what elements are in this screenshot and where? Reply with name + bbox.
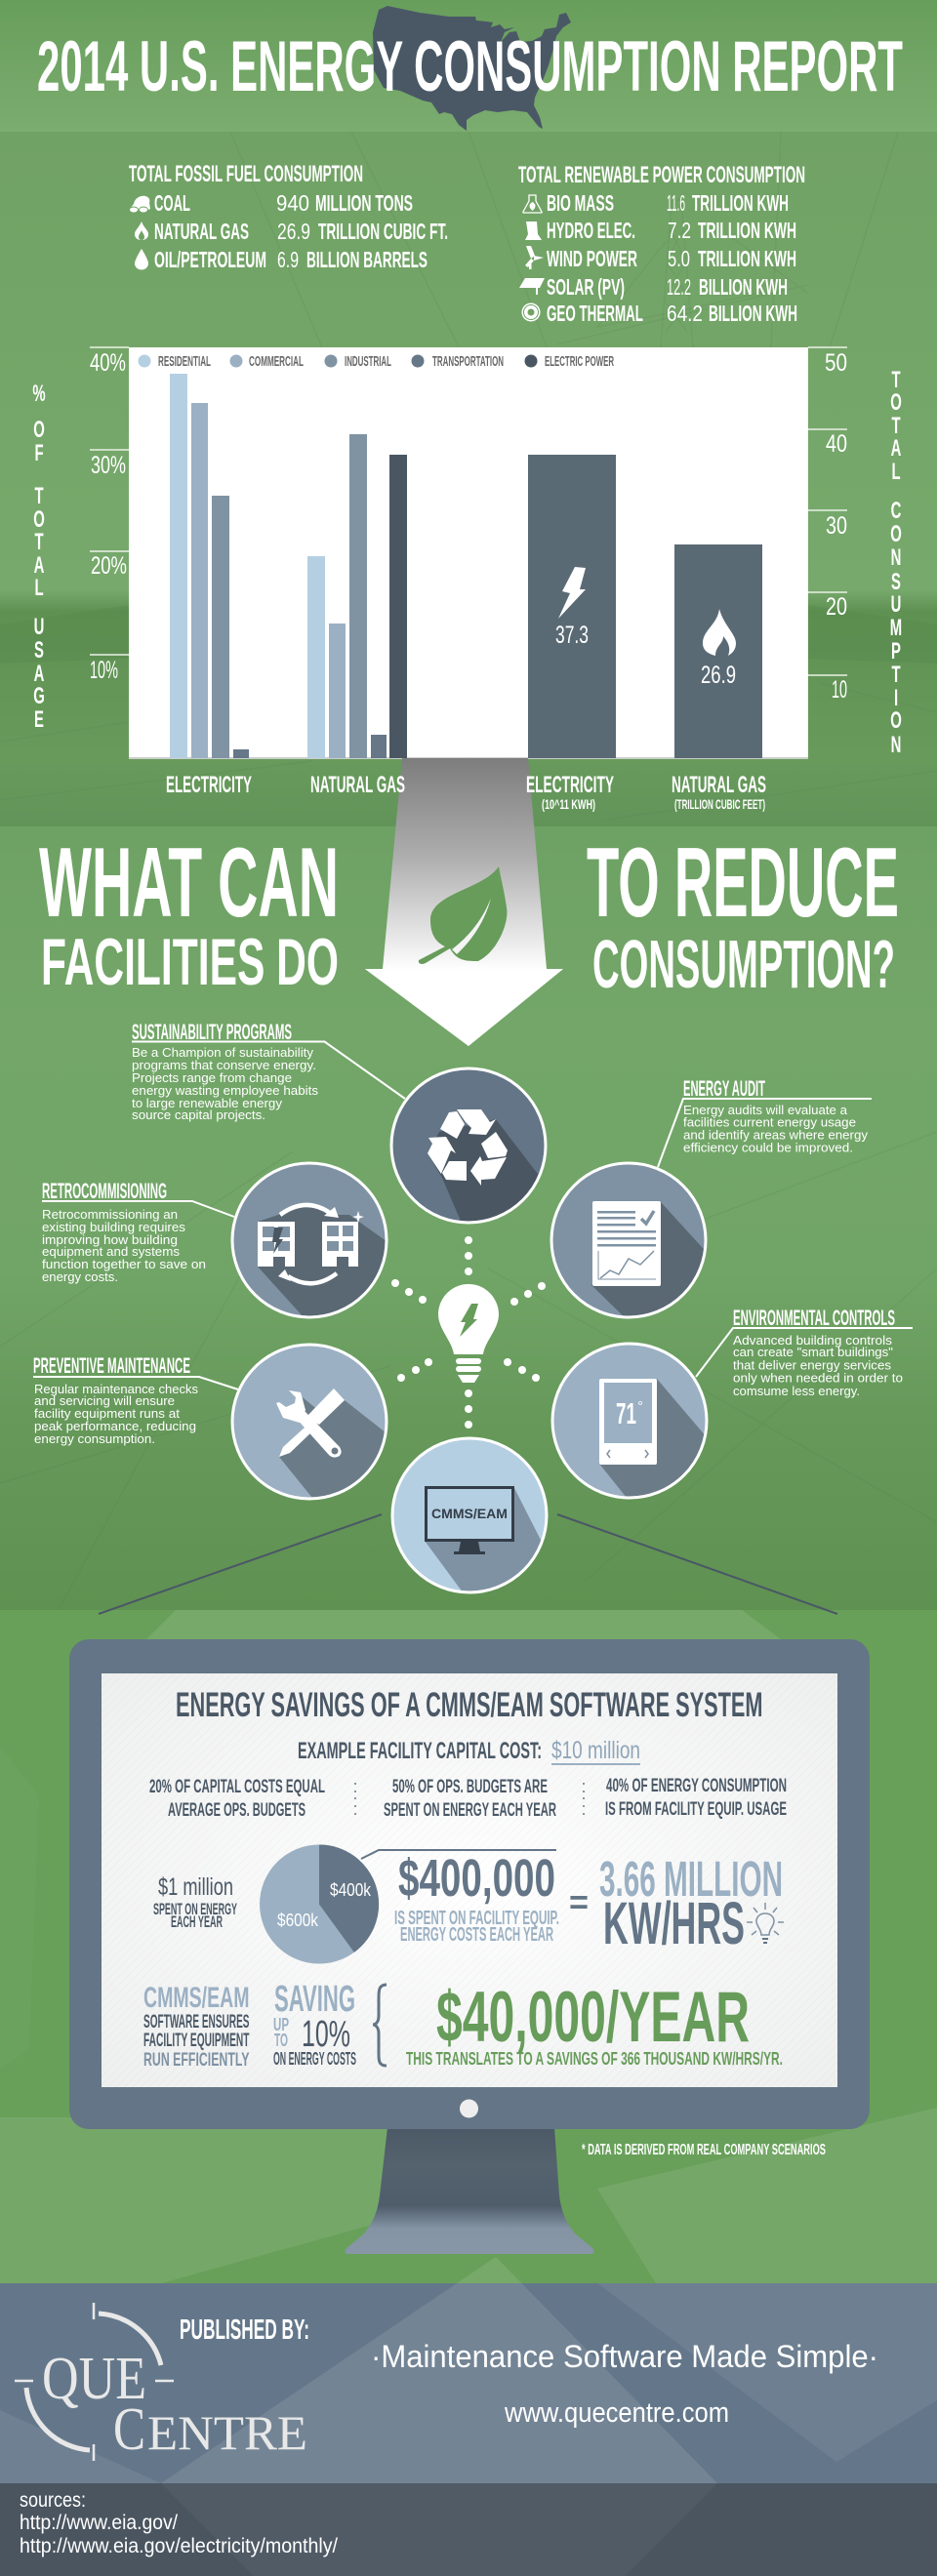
row: solar: 12.2 — [667, 274, 691, 300]
left axis labels: 40% — [90, 349, 126, 377]
row: hydro — [547, 218, 796, 243]
row: oil: BILLION BARRELS — [306, 247, 428, 272]
tagline: ·Maintenance Software Made Simple· — [371, 2339, 878, 2374]
x axis labels: ELECTRICITY — [166, 772, 252, 798]
software note — [143, 1982, 250, 2071]
y axis label: percent of total usage: U — [34, 615, 44, 640]
monitor stand — [346, 2127, 593, 2254]
y axis label: total consumption: N — [891, 733, 901, 758]
row: coal — [154, 190, 413, 216]
sources: http://www.eia.gov/ — [20, 2512, 178, 2534]
x axis labels: (10^11 KWH) — [542, 796, 595, 812]
row: hydro: 7.2 — [668, 218, 691, 243]
connecting dots — [391, 1236, 546, 1429]
right axis labels: 50 — [825, 349, 847, 377]
callout: preventive maintenance: and servicing will ensure — [34, 1394, 175, 1408]
one million label: $1 million — [158, 1873, 233, 1901]
callout: energy audit: ENERGY AUDIT — [683, 1076, 765, 1101]
row: wind — [547, 246, 796, 271]
y axis label: total consumption: N — [891, 545, 901, 571]
capital cost line: EXAMPLE FACILITY CAPITAL COST: — [298, 1738, 542, 1764]
logo: Que Centre — [15, 2303, 307, 2463]
callout: retrocommisioning: improving how building — [42, 1233, 178, 1247]
y axis label: percent of total usage: E — [34, 707, 44, 733]
callout: sustainability programs: Projects range from change — [132, 1071, 292, 1085]
row: wind: TRILLION KWH — [698, 246, 796, 271]
legend: INDUSTRIAL — [345, 354, 391, 370]
icon: oil drop — [135, 249, 148, 269]
savings result — [406, 1978, 783, 2069]
callout: sustainability programs: Be a Champion of sustainability — [132, 1046, 314, 1060]
y axis label: total consumption: I — [894, 686, 898, 711]
y axis label: total consumption — [890, 368, 902, 758]
bar: total electricity: 37.3 — [555, 622, 589, 649]
saving note: SAVING — [274, 1979, 355, 2020]
y axis label: total consumption: T — [891, 414, 901, 439]
right axis labels — [825, 349, 847, 704]
callout: retrocommisioning: equipment and systems — [42, 1245, 180, 1259]
icon: coal — [129, 196, 150, 213]
y axis label: percent of total usage — [32, 382, 46, 733]
equals sign: = — [569, 1884, 589, 1921]
row: geo thermal: GEO THERMAL — [547, 301, 643, 326]
logo: Que Centre: ENTRE — [147, 2405, 307, 2460]
row: wind: WIND POWER — [547, 246, 637, 271]
y axis label: total consumption: O — [890, 522, 902, 547]
four hundred thousand callout — [394, 1849, 559, 1946]
one million label: EACH YEAR — [171, 1912, 223, 1931]
software note: RUN EFFICIENTLY — [143, 2050, 250, 2071]
icon: flame — [135, 221, 148, 240]
saving note: TO — [274, 2031, 288, 2050]
icon: lightning bolt — [558, 567, 586, 619]
y axis label: percent of total usage: S — [34, 638, 44, 664]
row: natural gas — [154, 219, 448, 244]
arrow with leaf — [365, 758, 563, 1046]
heading: what can facilities do: WHAT CAN — [39, 828, 339, 938]
statistic columns: SPENT ON ENERGY EACH YEAR — [384, 1800, 556, 1821]
y axis label: total consumption: M — [890, 616, 902, 641]
bars: natural gas by sector — [307, 434, 407, 758]
callout: preventive maintenance — [33, 1353, 238, 1446]
row: coal: 940 — [276, 190, 309, 216]
legend: ELECTRIC POWER — [545, 354, 614, 370]
left axis labels: 30% — [91, 452, 126, 479]
four hundred thousand callout: IS SPENT ON FACILITY EQUIP. — [394, 1908, 559, 1929]
y axis label: percent of total usage: T — [34, 484, 44, 509]
kilowatt hours: KW/HRS — [603, 1890, 745, 1956]
y axis label: total consumption: C — [891, 499, 901, 524]
icon: report document — [592, 1201, 661, 1286]
callout: preventive maintenance: Regular maintenance checks — [34, 1383, 198, 1396]
row: bio mass — [547, 190, 789, 216]
panel: fossil fuel consumption: TOTAL FOSSIL FUEL CONSUMPTION — [129, 161, 363, 187]
callout: environmental controls: comsume less energy. — [733, 1385, 860, 1398]
callout: preventive maintenance: facility equipment runs at — [34, 1407, 181, 1421]
connector lines to monitor — [99, 1514, 837, 1614]
icon: thermostat: 71 — [616, 1396, 636, 1430]
icon: thermostat — [599, 1379, 657, 1465]
callout: energy audit: facilities current energy usage — [683, 1116, 856, 1130]
one million label — [153, 1873, 237, 1931]
legend: RESIDENTIAL — [158, 354, 211, 370]
x axis labels: NATURAL GAS — [672, 772, 766, 798]
x axis labels: ELECTRICITY — [526, 772, 614, 798]
y axis label: percent of total usage: L — [34, 576, 44, 601]
callout: retrocommisioning: RETROCOMMISIONING — [42, 1179, 167, 1203]
legend: COMMERCIAL — [249, 354, 304, 370]
icon: solar panel — [519, 278, 545, 295]
y axis label: percent of total usage: % — [32, 382, 46, 407]
y axis label: total consumption: S — [891, 570, 901, 595]
kilowatt hours — [599, 1851, 784, 1956]
legend — [139, 354, 614, 370]
circle: recycle — [391, 1068, 547, 1239]
row: solar — [547, 274, 788, 300]
row: natural gas: NATURAL GAS — [154, 219, 249, 244]
callout: sustainability programs: SUSTAINABILITY PROGRAMS — [132, 1020, 292, 1044]
callout: retrocommisioning — [42, 1179, 234, 1284]
row: solar: SOLAR (PV) — [547, 274, 625, 300]
bar: total natural gas — [674, 544, 762, 758]
y axis label: percent of total usage: A — [34, 553, 44, 579]
row: natural gas: 26.9 — [277, 219, 310, 244]
callout: preventive maintenance: peak performance, reducing — [34, 1420, 196, 1433]
saving note: 10% — [302, 2014, 350, 2055]
callout: preventive maintenance: energy consumption. — [34, 1432, 155, 1446]
sources: http://www.eia.gov/electricity/monthly/ — [20, 2535, 338, 2557]
callout: retrocommisioning: Retrocommissioning an — [42, 1208, 178, 1222]
icon: geothermal globe — [521, 302, 541, 322]
icon: home button — [460, 2100, 478, 2117]
icon: buildings with arrows — [258, 1205, 364, 1283]
row: geo thermal — [547, 301, 797, 326]
row: coal: COAL — [154, 190, 190, 216]
monitor — [69, 1639, 870, 2129]
y axis label: total consumption: L — [891, 460, 901, 485]
bar: total electricity — [528, 455, 616, 758]
pie chart: $600k — [277, 1911, 319, 1930]
callout: energy audit: efficiency could be improved. — [683, 1142, 853, 1155]
y axis label: total consumption: O — [890, 390, 902, 416]
callout: retrocommisioning: energy costs. — [42, 1270, 118, 1284]
row: coal: MILLION TONS — [315, 190, 413, 216]
circle: environmental controls — [552, 1344, 713, 1508]
heading: what can facilities do: FACILITIES DO — [41, 925, 339, 999]
y axis label: total consumption: U — [891, 592, 901, 618]
right axis labels: 10 — [832, 676, 847, 704]
monitor: ON ENERGY COSTS — [273, 2049, 356, 2069]
row: hydro: HYDRO ELEC. — [547, 218, 635, 243]
software note: SOFTWARE ENSURES — [143, 2012, 250, 2033]
y axis label: percent of total usage: F — [34, 441, 44, 466]
right axis labels: 30 — [826, 512, 847, 540]
bars: electricity by sector — [170, 374, 249, 758]
callout: retrocommisioning: function together to save on — [42, 1258, 206, 1271]
right axis labels: 20 — [826, 593, 847, 621]
heading: what can facilities do — [39, 828, 339, 999]
software note: FACILITY EQUIPMENT — [143, 2031, 250, 2051]
savings result: $40,000/YEAR — [436, 1978, 750, 2057]
row: bio mass: TRILLION KWH — [692, 190, 789, 216]
row: geo thermal: BILLION KWH — [709, 301, 797, 326]
row: oil: OIL/PETROLEUM — [154, 247, 266, 272]
callout: environmental controls: only when needed in order to — [733, 1372, 903, 1386]
website: www.quecentre.com — [504, 2397, 729, 2429]
one million label: SPENT ON ENERGY — [153, 1900, 237, 1918]
callout: sustainability programs: energy wasting employee habits — [132, 1084, 318, 1098]
row: geo thermal: 64.2 — [667, 301, 703, 326]
capital cost line: $10 million — [551, 1737, 640, 1764]
callout: environmental controls: can create "smart buildings" — [733, 1346, 893, 1359]
y axis label: percent of total usage: G — [33, 684, 45, 709]
icon: small bulb — [747, 1903, 784, 1943]
x axis labels: NATURAL GAS — [310, 772, 405, 798]
saving note — [273, 1979, 356, 2069]
footer panel — [0, 2257, 937, 2576]
pie chart — [260, 1844, 556, 1963]
x axis labels: (TRILLION CUBIC FEET) — [674, 796, 765, 812]
published by: PUBLISHED BY: — [180, 2314, 309, 2346]
icon: leaf — [419, 866, 507, 964]
statistic columns: 40% OF ENERGY CONSUMPTION — [606, 1776, 787, 1796]
logo: Que Centre: QUE — [42, 2346, 146, 2412]
icon: central light bulb — [438, 1284, 499, 1383]
callout: environmental controls: Advanced building controls — [733, 1334, 892, 1348]
callout: environmental controls: that deliver energy services — [733, 1358, 891, 1372]
left axis labels: 20% — [91, 552, 127, 580]
row: hydro: TRILLION KWH — [698, 218, 796, 243]
panel: renewable power consumption — [518, 162, 805, 326]
brace — [373, 1985, 387, 2066]
panel: fossil fuel consumption — [129, 161, 448, 272]
kilowatt hours: 3.66 MILLION — [599, 1851, 783, 1907]
icon: computer monitor: CMMS/EAM — [431, 1506, 508, 1521]
y axis label: total consumption: P — [891, 639, 901, 664]
logo: Que Centre: C — [113, 2396, 145, 2463]
icon: flame — [703, 609, 736, 656]
statistic columns: AVERAGE OPS. BUDGETS — [168, 1800, 306, 1821]
bar chart — [90, 347, 847, 759]
callout: energy audit: and identify areas where energy — [683, 1128, 869, 1142]
pie chart: $400k — [330, 1880, 372, 1900]
row: oil — [154, 247, 428, 272]
circle: CMMS/EAM — [392, 1438, 551, 1600]
left axis labels: 10% — [90, 657, 118, 684]
icon: wrench and screwdriver — [276, 1389, 345, 1458]
bar: total natural gas: 26.9 — [701, 662, 736, 689]
callout: sustainability programs: to large renewable energy — [132, 1097, 283, 1110]
row: solar: BILLION KWH — [699, 274, 788, 300]
four hundred thousand callout: $400,000 — [398, 1849, 555, 1908]
y axis label: total consumption: A — [891, 436, 901, 462]
callout: energy audit: Energy audits will evaluate a — [683, 1104, 847, 1117]
row: natural gas: TRILLION CUBIC FT. — [318, 219, 448, 244]
statistic columns — [149, 1776, 787, 1821]
four hundred thousand callout: ENERGY COSTS EACH YEAR — [400, 1924, 553, 1946]
y axis label: percent of total usage: O — [33, 418, 45, 443]
statistic columns: IS FROM FACILITY EQUIP. USAGE — [605, 1799, 787, 1820]
row: wind: 5.0 — [668, 246, 690, 271]
icon: computer monitor — [426, 1487, 513, 1554]
callout: retrocommisioning: existing building requires — [42, 1221, 185, 1234]
statistic columns: 20% OF CAPITAL COSTS EQUAL — [149, 1777, 325, 1797]
sources — [20, 2489, 338, 2557]
callout: energy audit — [658, 1076, 872, 1167]
icon: recycle arrows — [428, 1109, 508, 1186]
y axis label: percent of total usage: A — [34, 662, 44, 687]
legend: TRANSPORTATION — [432, 354, 504, 370]
software note: CMMS/EAM — [143, 1982, 250, 2014]
icon: wind turbine — [525, 246, 544, 269]
heading: to reduce consumption — [587, 828, 899, 1002]
row: bio mass: 11.6 — [667, 190, 685, 216]
callout: sustainability programs: programs that conserve energy. — [132, 1059, 316, 1072]
circle: preventive maintenance — [232, 1345, 390, 1508]
y axis label: total consumption: O — [890, 708, 902, 734]
icon: hydro dam — [525, 221, 542, 240]
statistic columns: 50% OF OPS. BUDGETS ARE — [392, 1777, 548, 1797]
saving note: UP — [273, 2015, 289, 2034]
callout: environmental controls — [696, 1306, 913, 1398]
y axis label: total consumption: T — [891, 368, 901, 393]
callout: preventive maintenance: PREVENTIVE MAINTENANCE — [33, 1353, 190, 1378]
y axis label: total consumption: T — [891, 663, 901, 688]
circle: retrocommissioning — [232, 1163, 390, 1327]
y axis label: percent of total usage: T — [34, 530, 44, 555]
row: oil: 6.9 — [277, 247, 299, 272]
x axis labels — [166, 772, 766, 812]
callout: sustainability programs: source capital projects. — [132, 1108, 265, 1122]
icon: USA map — [373, 6, 571, 131]
sources: sources: — [20, 2489, 86, 2512]
row: bio mass: BIO MASS — [547, 190, 614, 216]
left axis labels — [90, 349, 127, 684]
circle: energy audit — [551, 1163, 713, 1327]
callout: sustainability programs — [132, 1020, 405, 1122]
icon: flask — [523, 195, 542, 213]
right axis labels: 40 — [826, 430, 847, 458]
y axis label: percent of total usage: O — [33, 507, 45, 533]
